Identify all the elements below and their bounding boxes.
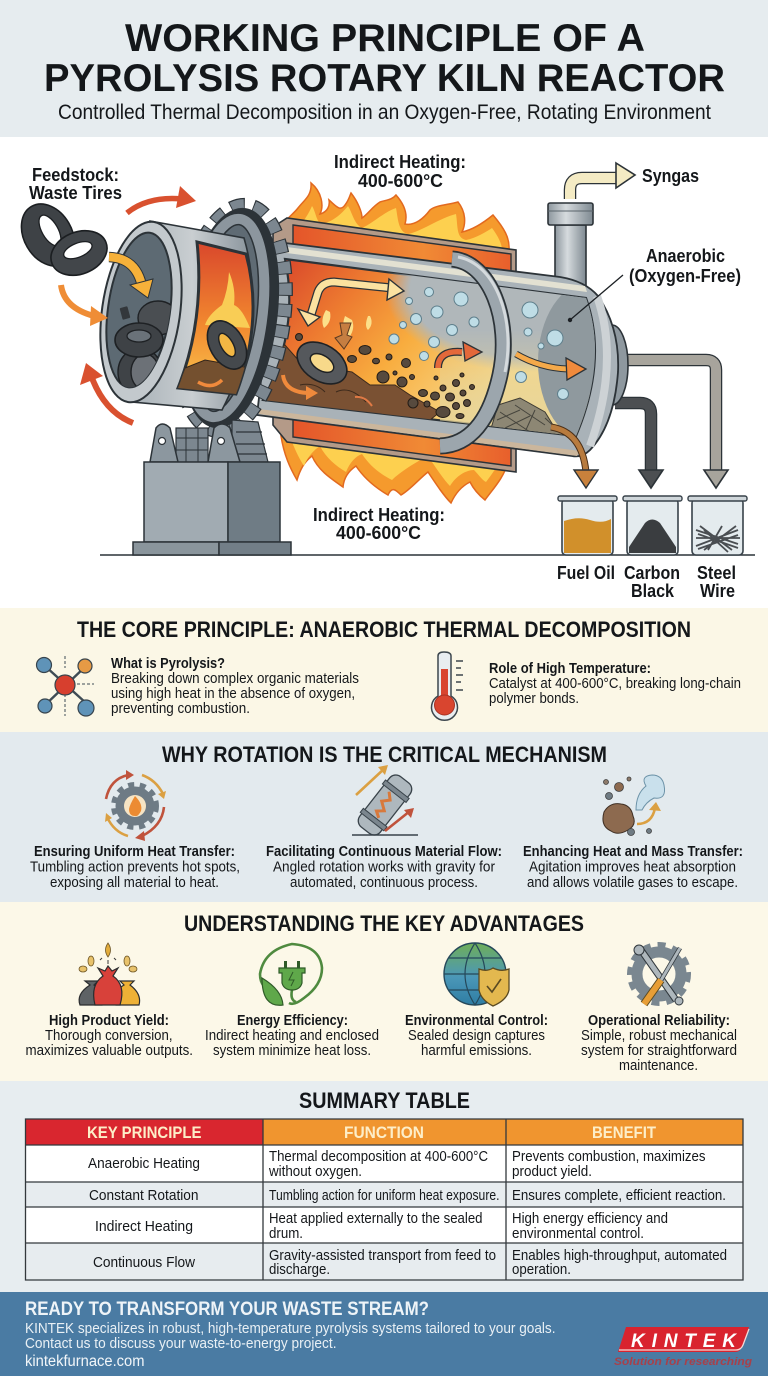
footer body: KINTEK specializes in robust, high-temperature pyrolysis systems tailored to your goals. bbox=[25, 1321, 556, 1337]
row: anaerobic heating: Prevents combustion, maximizes bbox=[512, 1149, 706, 1165]
icon: gas and solids bbox=[603, 775, 665, 836]
icon: product bags bbox=[79, 943, 140, 1005]
debris bbox=[296, 334, 474, 418]
table bbox=[26, 1119, 743, 1280]
pointer: anaerobic bbox=[568, 275, 623, 322]
row: indirect heating: Indirect Heating bbox=[95, 1219, 193, 1235]
text: continuous material flow bbox=[266, 844, 502, 891]
panel: summary table bbox=[0, 1081, 768, 1292]
row: anaerobic heating: Anaerobic Heating bbox=[88, 1156, 200, 1172]
ground line bbox=[100, 554, 755, 556]
title bbox=[44, 17, 725, 100]
label: indirect heating bottom: 400-600°C bbox=[336, 523, 421, 543]
waste tires bbox=[11, 194, 114, 283]
label: feedstock bbox=[29, 165, 122, 203]
brown char mound bbox=[262, 345, 440, 420]
pedestal bbox=[133, 462, 291, 555]
oil discharge arrow bbox=[551, 427, 598, 488]
reactor tube bbox=[256, 241, 620, 458]
arrow: rotation near tire bbox=[283, 375, 318, 400]
row: indirect heating: environmental control. bbox=[512, 1226, 644, 1242]
icon: plug with leaf bbox=[260, 944, 322, 1005]
text: operational reliability: Operational Reliability: bbox=[588, 1013, 730, 1029]
text: continuous material flow: Angled rotation works with gravity for bbox=[273, 860, 495, 876]
text: environmental control: harmful emissions. bbox=[421, 1043, 532, 1059]
footer link: kintekfurnace.com bbox=[25, 1353, 144, 1370]
row: continuous flow bbox=[93, 1248, 727, 1278]
pipe arrow: steel wire bbox=[625, 360, 728, 488]
label: feedstock: Feedstock: bbox=[32, 165, 119, 185]
text: uniform heat transfer: exposing all material to heat. bbox=[50, 875, 219, 891]
gas bubbles bbox=[389, 288, 568, 400]
row: continuous flow: Enables high-throughput, automated bbox=[512, 1248, 727, 1264]
label: steel wire: Steel bbox=[697, 563, 736, 583]
flames: bottom bbox=[281, 436, 508, 503]
arrow: rising gas bbox=[438, 342, 482, 368]
text: operational reliability: Simple, robust mechanical bbox=[581, 1028, 737, 1044]
text: what is pyrolysis: Breaking down complex organic materials bbox=[111, 671, 359, 687]
panel: header bbox=[0, 0, 768, 137]
label: steel wire bbox=[697, 563, 736, 601]
pipe arrow: carbon black bbox=[615, 403, 663, 488]
text: uniform heat transfer: Tumbling action prevents hot spots, bbox=[30, 860, 240, 876]
text: high product yield: Thorough conversion, bbox=[45, 1028, 172, 1044]
footer heading: READY TO TRANSFORM YOUR WASTE STREAM? bbox=[25, 1299, 429, 1320]
row: continuous flow: operation. bbox=[512, 1262, 571, 1278]
text: continuous material flow: automated, continuous process. bbox=[290, 875, 478, 891]
row: constant rotation: Constant Rotation bbox=[89, 1188, 198, 1204]
text: role of high temperature: Catalyst at 400-600°C, breaking long-chain bbox=[489, 676, 741, 692]
text: what is pyrolysis: preventing combustion. bbox=[111, 701, 250, 717]
text: what is pyrolysis: What is Pyrolysis? bbox=[111, 656, 225, 672]
heading: SUMMARY TABLE bbox=[299, 1088, 470, 1113]
reactor window bbox=[261, 258, 596, 437]
text: role of high temperature: Role of High Temperature: bbox=[489, 661, 651, 677]
row: continuous flow: Gravity-assisted transport from feed to bbox=[269, 1248, 496, 1264]
panel: rotary kiln diagram bbox=[20, 154, 755, 597]
text: heat and mass transfer bbox=[523, 844, 743, 891]
A-frame supports bbox=[150, 424, 240, 462]
tires inside drum bbox=[114, 300, 171, 388]
label: carbon black: Black bbox=[631, 581, 675, 601]
icon: wrench screwdriver gear bbox=[630, 945, 688, 1005]
logo: KINTEK: Solution for researching bbox=[614, 1356, 752, 1368]
row: constant rotation: Tumbling action for uniform heat exposure. bbox=[269, 1188, 500, 1204]
label: indirect heating bottom: Indirect Heating: bbox=[313, 505, 445, 525]
row: anaerobic heating: Thermal decomposition at 400-600°C bbox=[269, 1149, 488, 1165]
icon: thermometer bbox=[432, 652, 463, 720]
label: carbon black bbox=[624, 563, 680, 601]
text: high product yield: High Product Yield: bbox=[49, 1013, 169, 1029]
title: WORKING PRINCIPLE OF A bbox=[125, 17, 645, 60]
label: steel wire: Wire bbox=[700, 581, 735, 601]
label: carbon black: Carbon bbox=[624, 563, 680, 583]
row: continuous flow: discharge. bbox=[269, 1262, 330, 1278]
row: constant rotation: Ensures complete, efficient reaction. bbox=[512, 1188, 726, 1204]
text: what is pyrolysis bbox=[111, 656, 359, 717]
table header row bbox=[26, 1119, 743, 1145]
icon: molecule bbox=[36, 656, 94, 716]
text: energy efficiency: Indirect heating and enclosed bbox=[205, 1028, 379, 1044]
text: environmental control: Environmental Control: bbox=[405, 1013, 548, 1029]
row: anaerobic heating bbox=[88, 1149, 706, 1180]
pile of steel wire bbox=[490, 398, 566, 436]
icon: tilted reactor bbox=[352, 765, 418, 839]
label: syngas: Syngas bbox=[642, 166, 699, 186]
panel: core principle bbox=[0, 608, 768, 732]
label: anaerobic: (Oxygen-Free) bbox=[629, 266, 741, 286]
logo: KINTEK: KINTEK bbox=[631, 1331, 737, 1352]
heading: THE CORE PRINCIPLE: ANAEROBIC THERMAL DECOMPOSITION bbox=[77, 617, 691, 642]
label: anaerobic: Anaerobic bbox=[646, 246, 725, 266]
beaker: steel wire bbox=[688, 496, 747, 555]
label: indirect heating top: Indirect Heating: bbox=[334, 152, 466, 172]
heading: WHY ROTATION IS THE CRITICAL MECHANISM bbox=[162, 742, 607, 767]
text: uniform heat transfer bbox=[30, 844, 240, 891]
arrow: flow to discharge bbox=[516, 354, 586, 380]
text: operational reliability bbox=[581, 1013, 737, 1074]
label: anaerobic bbox=[629, 246, 741, 286]
arrow: syngas bbox=[570, 163, 635, 199]
panel: footer call to action bbox=[0, 1292, 768, 1376]
text: energy efficiency bbox=[205, 1013, 379, 1059]
icon: gear with flame and arrows bbox=[105, 770, 166, 841]
label: indirect heating top bbox=[334, 152, 466, 191]
row: indirect heating bbox=[95, 1211, 668, 1242]
title: PYROLYSIS ROTARY KILN REACTOR bbox=[44, 57, 725, 100]
heading: UNDERSTANDING THE KEY ADVANTAGES bbox=[184, 911, 584, 936]
text: environmental control: Sealed design captures bbox=[408, 1028, 545, 1044]
arrow: red top bbox=[127, 186, 196, 213]
row: indirect heating: Heat applied externally to the sealed bbox=[269, 1211, 482, 1227]
end cap highlight bbox=[590, 296, 607, 446]
text: operational reliability: system for straightforward bbox=[581, 1043, 737, 1059]
text: uniform heat transfer: Ensuring Uniform Heat Transfer: bbox=[34, 844, 235, 860]
beaker: carbon black bbox=[623, 496, 682, 555]
text: environmental control bbox=[405, 1013, 548, 1059]
panel: key advantages bbox=[0, 902, 768, 1081]
footer body: Contact us to discuss your waste-to-energy project. bbox=[25, 1336, 336, 1352]
furnace housing bbox=[273, 218, 516, 472]
text: high product yield bbox=[26, 1013, 193, 1059]
label: indirect heating top: 400-600°C bbox=[358, 171, 443, 191]
flames: top bbox=[283, 183, 509, 250]
text: high product yield: maximizes valuable outputs. bbox=[26, 1043, 193, 1059]
arrow: red bottom bbox=[80, 363, 133, 423]
text: continuous material flow: Facilitating Continuous Material Flow: bbox=[266, 844, 502, 860]
beaker: fuel oil bbox=[558, 496, 617, 555]
text: heat and mass transfer: Enhancing Heat and Mass Transfer: bbox=[523, 844, 743, 860]
mid support ring bbox=[440, 257, 508, 446]
label: feedstock: Waste Tires bbox=[29, 183, 122, 203]
arrow: small down bbox=[335, 323, 352, 349]
label: indirect heating bottom bbox=[313, 505, 445, 543]
rear outlet housing bbox=[596, 325, 628, 405]
icon: globe with shield bbox=[444, 943, 509, 1006]
text: heat and mass transfer: Agitation improves heat absorption bbox=[529, 860, 736, 876]
drum mouth bbox=[90, 216, 192, 408]
arrow: orange feed bbox=[61, 285, 108, 326]
row: constant rotation bbox=[89, 1188, 726, 1204]
row: anaerobic heating: product yield. bbox=[512, 1164, 592, 1180]
text: role of high temperature: polymer bonds. bbox=[489, 691, 579, 707]
tire in reactor bbox=[290, 333, 354, 393]
row: continuous flow: Continuous Flow bbox=[93, 1255, 195, 1271]
text: heat and mass transfer: and allows volatile gases to escape. bbox=[527, 875, 738, 891]
front drum bbox=[90, 216, 255, 410]
drum cutaway window bbox=[175, 242, 255, 398]
text: role of high temperature bbox=[489, 661, 741, 707]
table header row: KEY PRINCIPLE bbox=[87, 1123, 202, 1142]
text: energy efficiency: Energy Efficiency: bbox=[237, 1013, 348, 1029]
table header row: FUNCTION bbox=[344, 1123, 424, 1142]
panel: why rotation bbox=[0, 732, 768, 902]
row: indirect heating: High energy efficiency and bbox=[512, 1211, 668, 1227]
text: operational reliability: maintenance. bbox=[619, 1058, 698, 1074]
table header row: BENEFIT bbox=[592, 1123, 657, 1142]
exhaust stack bbox=[548, 203, 593, 287]
row: indirect heating: drum. bbox=[269, 1226, 303, 1242]
footer body bbox=[25, 1321, 556, 1352]
arrow: internal tumbling bbox=[298, 279, 404, 326]
gear teeth behind supports bbox=[176, 420, 268, 462]
arrow: yellow feed bbox=[109, 257, 153, 298]
text: energy efficiency: system minimize heat loss. bbox=[213, 1043, 371, 1059]
label: fuel oil: Fuel Oil bbox=[557, 563, 615, 583]
row: anaerobic heating: without oxygen. bbox=[268, 1164, 362, 1180]
logo: KINTEK bbox=[614, 1327, 752, 1368]
text: what is pyrolysis: using high heat in the absence of oxygen, bbox=[111, 686, 355, 702]
gear bbox=[167, 200, 297, 436]
